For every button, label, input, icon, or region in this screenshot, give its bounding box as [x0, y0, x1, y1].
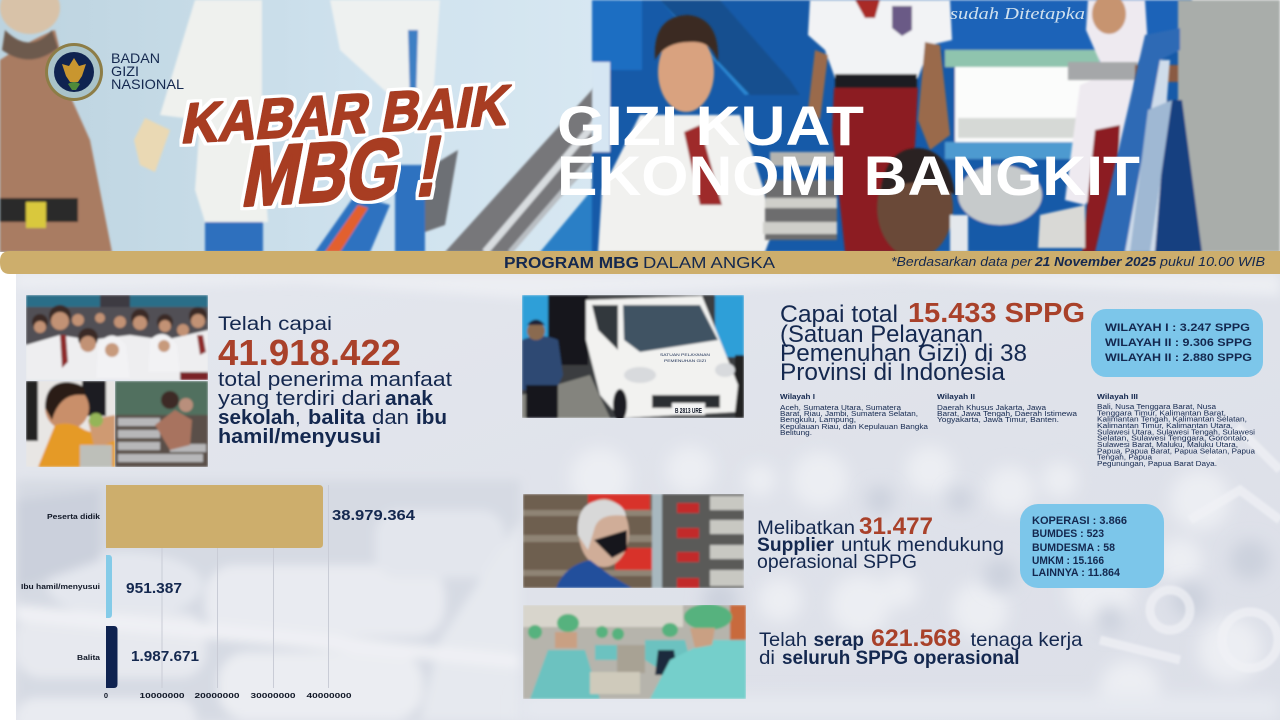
boy with tie — [598, 15, 775, 252]
callout: SPPG per region — [1091, 309, 1263, 377]
blue mural wall — [592, 0, 1192, 252]
number: total beneficiaries: 41.918.422 — [218, 332, 401, 373]
text block: Wilayah II provinces: Wilayah II — [937, 394, 975, 401]
text block: total beneficiaries — [218, 314, 452, 448]
mural lettering: sudah Ditetapka — [950, 4, 1085, 23]
text block: total beneficiaries: yang terdiri dari — [218, 387, 381, 410]
text block: total beneficiaries: total penerima manfaat — [218, 368, 452, 391]
text block: Wilayah III provinces: Kalimantan Timur, Kalimantan Utara, — [1097, 423, 1233, 430]
text block: suppliers: Supplier — [757, 534, 834, 556]
text block: Wilayah III provinces: Bali, Nusa Tenggara Barat, Nusa — [1097, 404, 1216, 411]
text block: total beneficiaries: sekolah — [218, 406, 295, 429]
bar chart: beneficiaries by group — [21, 485, 415, 700]
text block: workers absorbed: seluruh SPPG operasional — [782, 647, 1020, 669]
text block: Wilayah III provinces: Pegunungan, Papua Barat Daya. — [1097, 461, 1217, 468]
mural figure: doctor left — [134, 0, 268, 252]
gold banner: Program MBG dalam angka: PROGRAM MBG — [504, 255, 639, 272]
photo: SPPG van — [522, 295, 744, 421]
bar: Ibu hamil/menyusui: 951.387 — [126, 581, 182, 597]
title: Kabar Baik MBG: KABAR BAIK — [178, 74, 515, 156]
callout: SPPG per region: WILAYAH I : 3.247 SPPG — [1105, 322, 1250, 334]
photo collage: beneficiaries — [26, 295, 208, 467]
text block: total SPPG: (Satuan Pelayanan — [780, 321, 983, 348]
text block: workers absorbed: Telah — [759, 629, 807, 651]
text block: Wilayah II provinces: Barat, Jawa Tengah, Daerah Istimewa — [937, 411, 1077, 418]
callout: supplier breakdown: BUMDES : 523 — [1032, 528, 1104, 540]
photo: supplier worker with mask — [523, 494, 744, 588]
logo: Badan Gizi Nasional: GIZI — [111, 63, 139, 79]
text block: Wilayah III provinces: Kalimantan Tengah, Kalimantan Selatan, — [1097, 417, 1247, 424]
stack of food trays — [763, 152, 837, 240]
text block: Wilayah I provinces: Wilayah I — [780, 394, 815, 401]
text block: total beneficiaries: , — [295, 406, 301, 429]
text block: Wilayah II provinces: Daerah Khusus Jakarta, Jawa — [937, 405, 1046, 412]
text block: Wilayah III provinces: Wilayah III — [1097, 394, 1138, 401]
bar: Ibu hamil/menyusui — [21, 555, 182, 618]
number: workers: 621.568 — [871, 625, 961, 652]
blue handrail and right wall — [1095, 0, 1280, 252]
photo: SPPG van: B 2813 URE — [675, 408, 702, 415]
text block: Wilayah III provinces: Sulawesi Utara, Sulawesi Tengah, Sulawesi — [1097, 429, 1256, 436]
text block: Wilayah I provinces: Aceh, Sumatera Utara, Sumatera — [780, 405, 901, 412]
text block: Wilayah III provinces: Papua, Papua Barat, Papua Selatan, Papua — [1097, 448, 1255, 455]
title: Kabar Baik MBG: MBG ! — [236, 119, 450, 225]
text block: suppliers: operasional SPPG — [757, 551, 917, 573]
bar: Peserta didik: 38.979.364 — [332, 508, 415, 524]
text block: Wilayah I provinces: Bengkulu, Lampung, — [780, 417, 856, 424]
bar: Balita: Balita — [77, 653, 101, 662]
number: suppliers: 31.477 — [859, 513, 933, 540]
text block: total beneficiaries: hamil/menyusui — [218, 425, 381, 448]
photo: SPPG van: SATUAN PELAYANAN — [660, 352, 710, 357]
text block: total beneficiaries: anak — [385, 387, 434, 410]
logo: Badan Gizi Nasional — [45, 43, 184, 101]
text block: suppliers: Melibatkan — [757, 517, 855, 539]
boy in red trousers — [808, 0, 952, 252]
text block: total beneficiaries: dan — [372, 406, 409, 429]
callout: supplier breakdown: BUMDESMA : 58 — [1032, 542, 1115, 554]
gold banner: Program MBG dalam angka: 21 November 2025 — [1034, 255, 1157, 269]
text block: Wilayah III provinces: Selatan, Sulawesi Tenggara, Gorontalo, — [1097, 436, 1249, 443]
headline: Gizi Kuat Ekonomi Bangkit: EKONOMI BANGKIT — [557, 144, 1140, 207]
callout: SPPG per region: WILAYAH II : 9.306 SPPG — [1105, 337, 1252, 349]
chart axis labels: 20000000 — [194, 691, 240, 700]
text block: total beneficiaries: balita — [308, 406, 366, 429]
callout: SPPG per region: WILAYAH II : 2.880 SPPG — [1105, 352, 1252, 364]
text block: suppliers — [757, 513, 1004, 573]
text block: workers absorbed: tenaga kerja — [970, 629, 1083, 651]
chart axis labels: 40000000 — [306, 691, 352, 700]
text block: total beneficiaries: ibu — [416, 406, 447, 429]
text block: Wilayah III provinces — [1097, 394, 1256, 468]
gold banner: Program MBG dalam angka — [0, 251, 1280, 274]
callout: supplier breakdown — [1020, 504, 1164, 588]
text block: workers absorbed — [759, 625, 1083, 669]
bar: Balita — [77, 626, 199, 688]
gold banner: Program MBG dalam angka: pukul 10.00 WIB — [1159, 255, 1265, 269]
text block: Wilayah II provinces — [937, 394, 1077, 424]
text block: Wilayah I provinces: Belitung. — [780, 430, 812, 437]
chart axis labels: 0 — [104, 691, 108, 700]
text block: total SPPG: Provinsi di Indonesia — [780, 359, 1006, 386]
gold banner: Program MBG dalam angka: DALAM ANGKA — [643, 255, 776, 272]
text block: Wilayah III provinces: Tengah, Papua — [1097, 455, 1152, 462]
text block: Wilayah II provinces: Yogyakarta, Jawa Timur, Banten. — [937, 417, 1059, 424]
bar: Peserta didik: Peserta didik — [47, 512, 101, 521]
text block: total SPPG: Capai total — [780, 301, 898, 328]
text block: Wilayah I provinces: Kepulauan Riau, dan Kepulauan Bangka — [780, 424, 928, 431]
chart axis labels — [104, 691, 352, 700]
logo: Badan Gizi Nasional: NASIONAL — [111, 76, 184, 92]
text block: workers absorbed: serap — [814, 629, 864, 651]
text block: total beneficiaries: Telah capai — [218, 314, 332, 335]
chart axis labels: 10000000 — [140, 691, 184, 700]
headline: Gizi Kuat Ekonomi Bangkit — [557, 94, 1140, 207]
stair railing — [444, 88, 598, 251]
callout: supplier breakdown: LAINNYA : 11.864 — [1032, 567, 1121, 579]
photo: kitchen workers — [523, 604, 746, 699]
callout: supplier breakdown: UMKM : 15.166 — [1032, 555, 1104, 567]
number: total SPPG: 15.433 SPPG — [908, 297, 1085, 328]
header photo: students on school stairs — [0, 0, 1280, 258]
photo: SPPG van: PEMENUHAN GIZI — [664, 358, 706, 363]
boy bottom centre — [877, 148, 968, 258]
chart axis labels: 30000000 — [250, 691, 296, 700]
mural figure: doctor right — [315, 0, 458, 252]
bar: Balita: 1.987.671 — [131, 649, 199, 665]
title: Kabar Baik MBG — [178, 74, 515, 225]
bar: Peserta didik — [47, 485, 415, 548]
girl with hijab holding tray — [1038, 0, 1185, 252]
text block: workers absorbed: di — [759, 647, 775, 669]
text block: total SPPG — [780, 297, 1085, 386]
headline: Gizi Kuat Ekonomi Bangkit: GIZI KUAT — [557, 94, 864, 157]
callout: supplier breakdown: KOPERASI : 3.866 — [1032, 515, 1127, 527]
lower background: trays and rice photo — [16, 274, 1280, 720]
text block: Wilayah III provinces: Tenggara Timur, Kalimantan Barat, — [1097, 410, 1226, 417]
logo: Badan Gizi Nasional: BADAN — [111, 50, 160, 66]
text block: total SPPG: Pemenuhan Gizi) di 38 — [780, 340, 1027, 367]
text block: Wilayah I provinces: Barat, Riau, Jambi, Sumatera Selatan, — [780, 411, 918, 418]
text block: Wilayah I provinces — [780, 394, 928, 437]
gold banner: Program MBG dalam angka: *Berdasarkan data per — [891, 255, 1033, 269]
mural figure: brown uniform — [0, 0, 112, 252]
text block: Wilayah III provinces: Sulawesi Barat, Maluku, Maluku Utara, — [1097, 442, 1238, 449]
text block: suppliers: untuk mendukung — [841, 534, 1004, 556]
bar: Ibu hamil/menyusui: Ibu hamil/menyusui — [21, 582, 100, 591]
